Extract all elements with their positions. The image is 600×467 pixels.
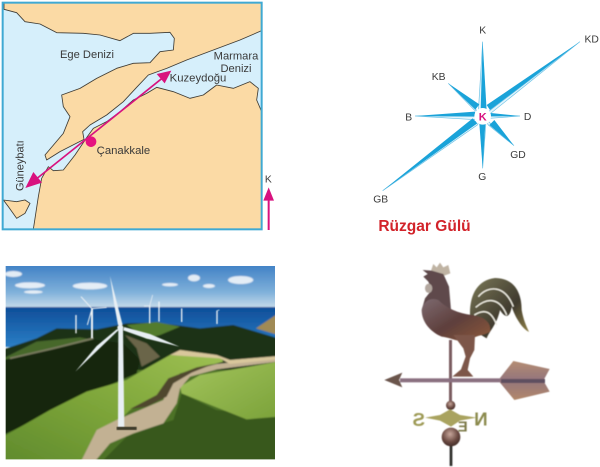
label: Güneybatı: Güneybatı <box>14 140 26 191</box>
rooster wattle <box>425 284 432 293</box>
lower ball <box>442 428 460 446</box>
label: Çanakkale: Çanakkale <box>97 145 150 157</box>
vane arrow fletching <box>500 361 550 400</box>
direction labels: GD <box>510 150 526 161</box>
dirt track on ridge <box>10 338 93 358</box>
green hill foreground <box>3 355 223 463</box>
land: north peninsula <box>4 3 262 160</box>
panel: wind farm photo <box>3 263 278 463</box>
upper ball <box>446 401 455 410</box>
centre disc <box>474 108 491 125</box>
label: Ege Denizi: Ege Denizi <box>60 49 114 61</box>
direction labels: D <box>524 112 531 123</box>
sky <box>3 263 278 308</box>
rooster head and neck <box>422 270 451 310</box>
marker: Çanakkale <box>86 136 96 147</box>
caption: Rüzgar Gülü: Rüzgar Gülü <box>378 218 471 235</box>
label: Kuzeydoğu: Kuzeydoğu <box>170 73 226 85</box>
compass direction bar and letters <box>413 408 488 436</box>
brown headland <box>255 314 275 336</box>
compass direction bar and letters: E <box>458 420 468 436</box>
rooster body <box>422 299 490 342</box>
rooster tail <box>470 278 529 338</box>
land: island <box>3 200 30 218</box>
direction labels: KB <box>432 72 446 83</box>
direction labels: B <box>405 113 412 124</box>
map frame <box>3 3 262 229</box>
thin pale blade edges <box>383 42 580 191</box>
map sea background <box>3 3 262 229</box>
turbine base shadow <box>117 427 137 430</box>
arrow: northeast-southwest wind axis <box>25 71 171 188</box>
sea <box>3 307 278 347</box>
upper track <box>170 350 278 364</box>
vane arrow shaft <box>400 378 503 382</box>
direction labels <box>373 26 599 206</box>
label: Marmara Denizi: Marmara <box>214 51 258 63</box>
clouds <box>5 271 253 294</box>
right green slope <box>180 362 278 419</box>
direction labels: G <box>478 172 486 183</box>
distant turbines <box>76 295 219 338</box>
land: south mainland <box>33 82 262 229</box>
dark far hills <box>6 322 275 372</box>
far green ridge <box>127 322 180 338</box>
wind rose blades <box>383 42 580 191</box>
centre label K: K <box>479 112 487 124</box>
vane arrow head <box>384 373 402 387</box>
dark forest slope <box>3 339 140 435</box>
panel: map of Dardanelles <box>3 3 274 230</box>
road cutting shadow <box>130 364 213 409</box>
tail feather gaps <box>474 289 513 325</box>
panel: wind rose <box>373 26 599 235</box>
rooster comb <box>430 263 450 276</box>
direction labels: GB <box>373 195 388 206</box>
label: Marmara Denizi: Denizi <box>220 63 252 75</box>
compass direction bar and letters: N <box>474 408 488 429</box>
direction labels: K <box>479 26 486 37</box>
dark trees lower right <box>104 394 275 460</box>
compass direction bar and letters: S <box>413 409 425 430</box>
rooster legs and feet <box>452 335 475 377</box>
winding road <box>80 357 278 463</box>
north indicator: K <box>265 174 272 185</box>
main wind turbine <box>75 276 179 428</box>
vane pole <box>449 340 452 466</box>
lower ground base <box>6 369 228 460</box>
solid blue blade sides <box>383 42 580 191</box>
north indicator <box>263 174 274 230</box>
direction labels: KD <box>584 35 599 46</box>
panel: rooster weather vane <box>384 263 550 466</box>
